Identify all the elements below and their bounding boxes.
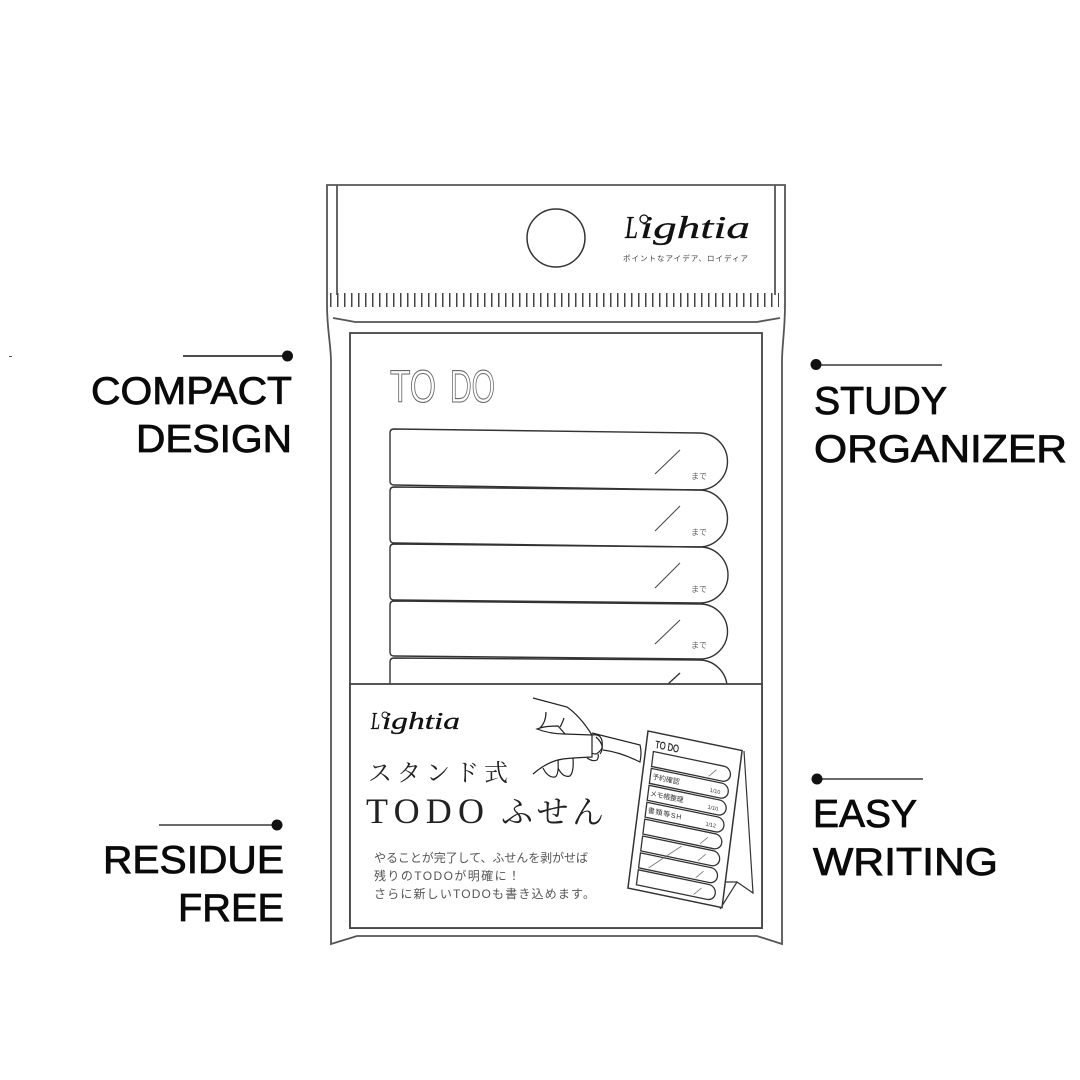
product title line 1: スタンド式	[368, 760, 508, 787]
stand front card	[628, 731, 742, 908]
hang hole	[527, 209, 585, 267]
description text: 残りのTODOが明確に！	[374, 868, 520, 883]
brand logo label: ightia	[382, 709, 460, 735]
sticky tab 4	[390, 601, 727, 659]
product title line 2: TODO	[366, 791, 484, 831]
sticky tab 2: まで	[691, 528, 707, 537]
callout: residue free: RESIDUE	[103, 839, 284, 882]
brand logo label: L	[370, 709, 380, 735]
sticky tab 5	[390, 658, 727, 690]
callout: easy writing	[812, 774, 998, 884]
callout: easy writing: EASY	[813, 793, 917, 836]
description text: やることが完了して、ふせんを剥がせば	[374, 850, 588, 865]
brand logo label	[370, 709, 460, 735]
stand front card: 1/10	[709, 788, 721, 796]
sticky tab 2	[390, 487, 728, 547]
stand front card: 予約確認	[652, 772, 680, 786]
package outline	[327, 185, 785, 944]
callout: easy writing: WRITING	[813, 841, 998, 884]
TO DO heading	[390, 361, 495, 412]
hanger header lines	[333, 185, 780, 322]
product title line 2	[366, 791, 604, 831]
callout: study organizer	[810, 359, 1067, 471]
perforation ticks	[330, 293, 779, 307]
brand logo header	[624, 209, 750, 245]
TO DO heading: TO	[390, 361, 436, 412]
window panel	[350, 333, 762, 928]
icon: hand peeling tab	[533, 698, 641, 777]
callout: residue free	[103, 820, 284, 930]
callout: compact design: DESIGN	[136, 418, 292, 461]
callout: compact design	[9, 350, 293, 461]
description text: さらに新しいTODOも書き込めます。	[374, 887, 595, 901]
lower label panel	[350, 684, 762, 928]
icon: stand with todo tabs	[628, 731, 753, 909]
TO DO heading: DO	[450, 361, 495, 412]
stand back fold	[720, 751, 753, 909]
stand front card: 書類等SH	[647, 806, 682, 821]
brand logo header: L	[624, 209, 638, 245]
package illustration	[327, 185, 785, 944]
sticky tab 3	[390, 544, 728, 603]
description text	[374, 850, 595, 901]
callout: study organizer: STUDY	[814, 380, 947, 423]
brand tagline: ポイントなアイデア、ロイディア	[623, 253, 748, 263]
stand front card: メモ帳整理	[650, 789, 684, 805]
product title line 2: ふせん	[501, 794, 604, 830]
sticky tab 1	[390, 429, 727, 490]
sticky tab 3: まで	[691, 585, 707, 594]
brand logo header: ightia	[640, 209, 750, 245]
callout: study organizer: ORGANIZER	[814, 428, 1067, 471]
stand front card: 1/10	[707, 805, 718, 813]
stand front card: TO DO	[655, 739, 680, 756]
sticky tab 4: まで	[691, 641, 707, 650]
stand front card: 1/12	[705, 822, 716, 830]
callout: compact design: COMPACT	[91, 370, 292, 413]
callout: residue free: FREE	[178, 887, 284, 930]
sticky tab 1: まで	[691, 472, 707, 481]
